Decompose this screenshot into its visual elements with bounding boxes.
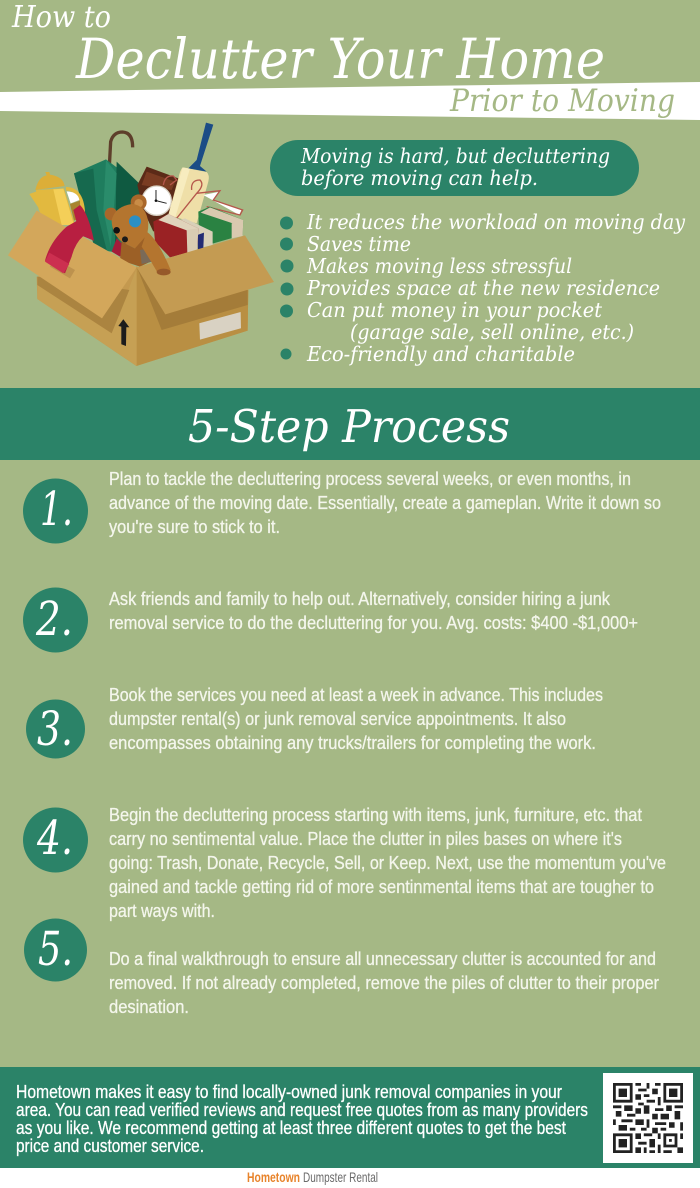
benefits list: Saves time	[307, 232, 411, 256]
benefits list: (garage sale, sell online, etc.)	[350, 320, 634, 344]
step 1: 1.	[40, 482, 73, 537]
logo	[0, 1168, 700, 1188]
step 5: 5.	[38, 922, 73, 977]
benefits list: Makes moving less stressful	[306, 254, 572, 278]
callout pill	[270, 140, 639, 196]
logo: Dumpster Rental	[303, 1169, 378, 1185]
step 3: Book the services you need at least a week in advance. This includes	[109, 684, 603, 705]
footer panel: area. You can read verified reviews and request free quotes from as many providers	[16, 1100, 588, 1120]
step 4: part ways with.	[109, 900, 215, 921]
footer panel: price and customer service.	[16, 1136, 204, 1156]
step 4: 4.	[36, 811, 73, 866]
benefits list	[280, 210, 685, 366]
step 4	[23, 804, 666, 921]
step 4: Begin the decluttering process starting with items, junk, furniture, etc. that	[109, 804, 642, 825]
step 3: 3.	[37, 702, 73, 757]
step 4: carry no sentimental value. Place the clutter in piles bases on where it's	[109, 828, 622, 849]
hanger	[163, 176, 243, 218]
illustration: moving box with clutter	[8, 123, 274, 366]
subtitle ribbon	[0, 82, 700, 120]
scarf front and bear arm over the box flap	[45, 220, 171, 278]
cardboard box	[8, 211, 274, 366]
footer panel	[0, 1067, 700, 1168]
logo: Hometown	[247, 1169, 300, 1185]
step 5: desination.	[109, 996, 189, 1017]
step 2: removal service to do the decluttering for you. Avg. costs: $400 -$1,000+	[109, 612, 638, 633]
footer panel: Hometown makes it easy to find locally-owned junk removal companies in your	[16, 1082, 562, 1102]
step 3	[26, 684, 603, 758]
section banner: 5-Step Process	[0, 388, 700, 460]
callout pill: before moving can help.	[301, 166, 538, 190]
subtitle ribbon: Prior to Moving	[449, 83, 675, 119]
benefits list: Can put money in your pocket	[307, 298, 603, 322]
clock case	[137, 167, 178, 232]
benefits list: Eco-friendly and charitable	[306, 342, 575, 366]
step 3: dumpster rental(s) or junk removal service appointments. It also	[109, 708, 566, 729]
section banner: 5-Step Process: 5-Step Process	[188, 400, 510, 453]
step 2: Ask friends and family to help out. Alternatively, consider hiring a junk	[109, 588, 611, 609]
step 1	[23, 468, 661, 544]
cricket bat	[168, 123, 213, 223]
title: How to	[11, 0, 111, 35]
teddy bear	[105, 194, 154, 267]
title: Declutter Your Home	[75, 27, 605, 91]
step 1: Plan to tackle the decluttering process several weeks, or even months, in	[109, 468, 631, 489]
step 3: encompasses obtaining any trucks/trailers for completing the work.	[109, 732, 596, 753]
footer panel: as you like. We recommend getting at least three different quotes to get the best	[16, 1118, 566, 1138]
title	[11, 0, 605, 91]
step 2: 2.	[35, 592, 73, 647]
scarf back	[73, 205, 128, 257]
benefits list: Provides space at the new residence	[306, 276, 660, 300]
teapot	[29, 172, 83, 225]
step 5	[24, 918, 659, 1017]
umbrella	[74, 132, 143, 253]
step 1: you're sure to stick to it.	[109, 516, 280, 537]
books	[153, 207, 243, 257]
step 2	[23, 588, 638, 652]
callout pill: Moving is hard, but decluttering	[300, 144, 610, 168]
QR code	[603, 1073, 693, 1163]
